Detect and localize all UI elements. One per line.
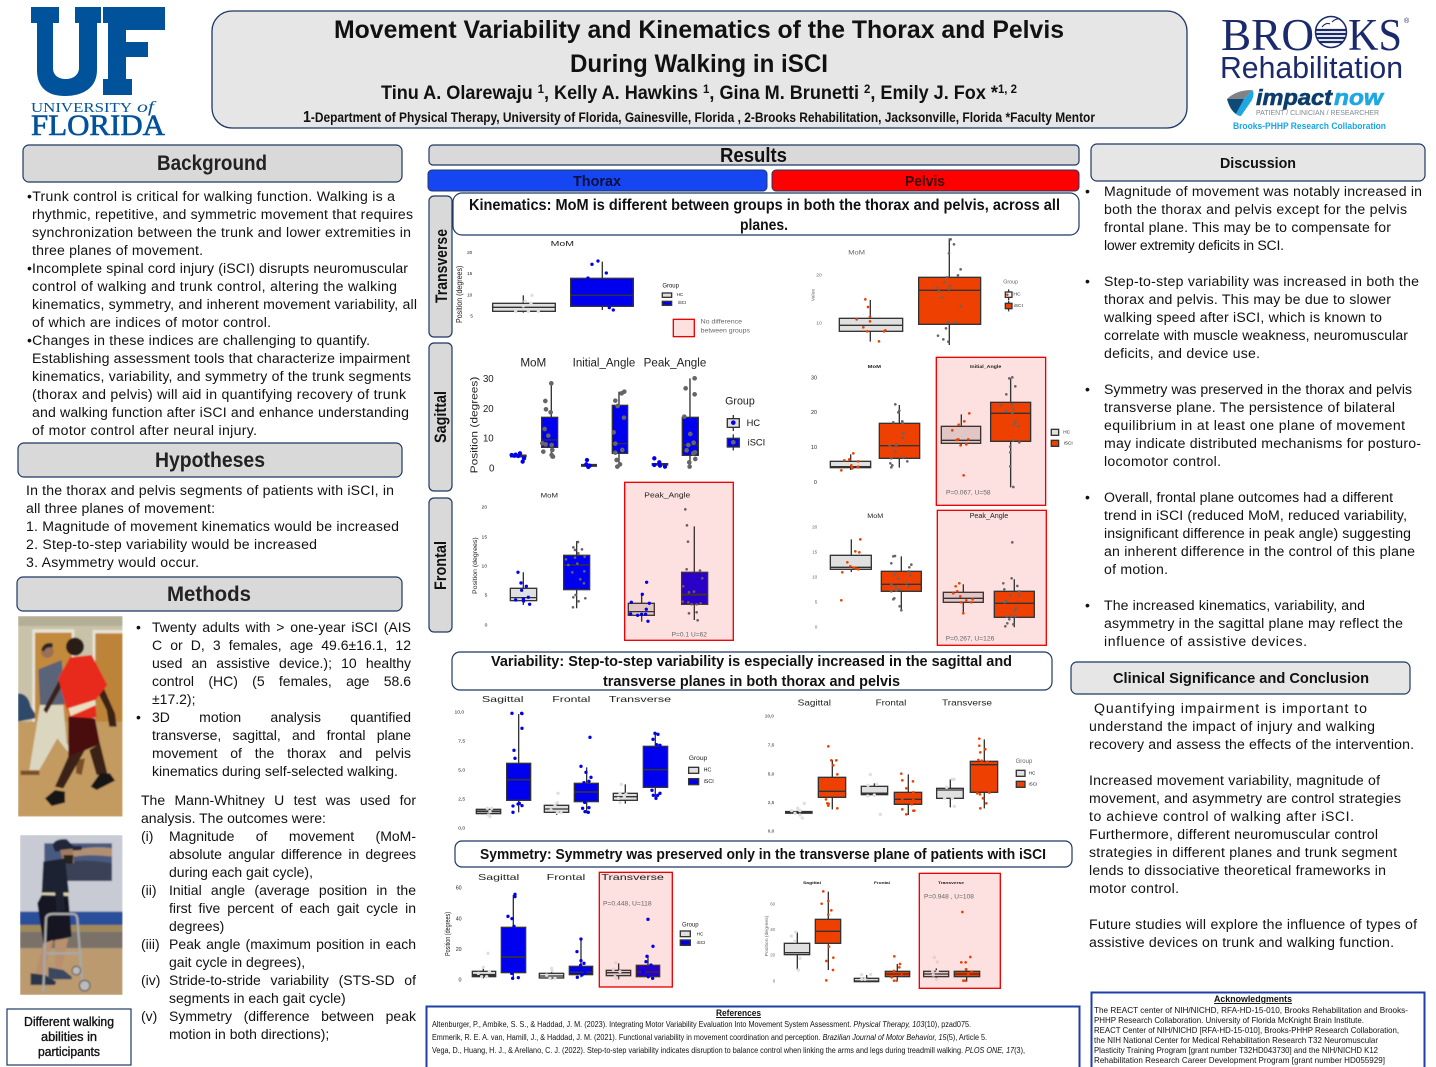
text block: hypotheses: 1. Magnitude of movement kinematics would be increased [26, 518, 399, 534]
text block: background: control of walking and trunk control, altering the walking [32, 278, 397, 294]
text block: methods: ±17.2); [152, 691, 195, 707]
chart: thorax variability: 2,5 [458, 797, 465, 803]
logo: Brooks Rehabilitation: Brooks-PHHP Research Collaboration [1233, 121, 1386, 132]
highlight: no difference transverse: Transverse [601, 872, 664, 882]
chart: thorax sagittal: 20 [483, 404, 494, 415]
highlight: no difference transverse: Transverse [938, 880, 965, 885]
chart: pelvis sagittal: HC [1063, 430, 1071, 435]
text block: discussion: both the thorax and pelvis except for the pelvis [1104, 201, 1407, 217]
text block: discussion: insignificant difference in peak angle) suggesting [1104, 525, 1411, 541]
chart: thorax transverse MoM [455, 239, 750, 337]
heading: variability [452, 652, 1052, 690]
title line 1: Movement Variability and Kinematics of the Thorax and Pelvis [334, 16, 1064, 44]
chart: pelvis sagittal: 20 [811, 410, 817, 416]
chart: pelvis variability: Group [1016, 759, 1033, 765]
text block: methods: C or D, 3 females, age 49.6±16.1, 12 [152, 637, 411, 653]
text block: discussion: • [1085, 183, 1090, 199]
text block: methods: (v) [141, 1008, 157, 1024]
heading: symmetry [455, 841, 1072, 867]
text block: methods: transverse, sagittal, and frontal plane [152, 727, 411, 743]
text block: methods: Initial angle (average position in the [169, 882, 416, 898]
text block: background: (thorax and pelvis) will aid in quantifying recovery of trunk [32, 386, 407, 402]
chart: thorax sagittal: 30 [483, 374, 494, 385]
chart: pelvis variability: Frontal [876, 698, 906, 708]
chart: pelvis frontal: 0 [815, 624, 818, 629]
text block: conclusion: Furthermore, different neuromuscular control [1089, 826, 1378, 842]
text block: discussion: Symmetry was preserved in the thorax and pelvis [1104, 381, 1412, 397]
chart: thorax frontal: 5 [485, 593, 488, 599]
text block: hypotheses: 2. Step-to-step variability would be increased [26, 536, 317, 552]
text block: background [27, 188, 417, 438]
authors: 2 [864, 82, 871, 96]
column header: thorax: Thorax [573, 173, 622, 190]
panel: references: Altenburger, P., Ambike, S. S., & Haddad, J. M. (2023). Integrating Motor Variability Evaluation Into Movement System Assessment. Physical Therapy, 103(10), pzad075. [432, 1020, 971, 1029]
text block: background: kinematics, symmetry, and inherent movement variability, all [32, 296, 417, 312]
legend: no difference: between groups [701, 328, 750, 335]
panel: acknowledgments: REACT Center of NIH/NICHD [RFA-HD-15-010], Brooks-PHHP Research Collaboration, [1094, 1025, 1399, 1035]
text block: methods: • [136, 709, 141, 725]
text block: discussion: of motion. [1104, 561, 1168, 577]
text block: discussion: frontal plane. This may be to compensate for [1104, 219, 1391, 235]
text block: methods: The Mann-Whitney U test was used for [141, 792, 416, 808]
highlight: no difference transverse: P=0.448, U=118 [603, 901, 652, 908]
text block: methods: • [136, 619, 141, 635]
row label: transverse: Transverse [433, 229, 451, 303]
chart: pelvis variability: 7,5 [768, 743, 775, 748]
logo: Brooks Rehabilitation: impact [1256, 85, 1334, 110]
text block: background: three planes of movement. [32, 242, 203, 258]
chart: thorax frontal: 10 [482, 564, 487, 570]
panel: hypotheses [18, 443, 402, 570]
callout: photo caption: Different walking [24, 1015, 114, 1029]
heading: kinematics [453, 193, 1079, 235]
text block: background: rhythmic, repetitive, and symmetric movement that requires [32, 206, 413, 222]
chart: thorax variability: 5,0 [458, 768, 465, 774]
chart: pelvis variability: 10,0 [765, 714, 774, 719]
photo: participant using walker [20, 835, 123, 995]
text block: discussion: correlate with muscle weakness, neuromuscular [1104, 327, 1408, 343]
text block: methods: during each gait cycle), [169, 864, 313, 880]
text block: discussion: • [1085, 597, 1090, 613]
panel: background [23, 145, 417, 438]
text block: discussion: The increased kinematics, variability, and [1104, 597, 1365, 613]
chart: pelvis symmetry [764, 873, 1000, 988]
text block: discussion: walking speed after iSCI, which is known to [1103, 309, 1382, 325]
callout: photo caption: abilities in [41, 1030, 97, 1044]
heading: background [23, 145, 402, 182]
text block: conclusion: strategies in different planes and trunk segment [1089, 844, 1397, 860]
heading: variability: Variability: Step-to-step variability is especially increased in the sagittal and [491, 654, 1012, 670]
text block: background: •Changes in these indices are challenging to quantify. [27, 332, 370, 348]
highlight: no difference peak angle: Peak_Angle [970, 513, 1008, 520]
chart: thorax transverse MoM: 20 [467, 250, 473, 255]
chart: thorax symmetry: Position (degrees) [443, 912, 452, 956]
text block: discussion: thorax and pelvis. This may be due to slower [1104, 291, 1391, 307]
chart: thorax variability: 10,0 [454, 710, 464, 716]
chart: pelvis sagittal [811, 357, 1073, 505]
logo: Brooks Rehabilitation: KS [1348, 10, 1402, 60]
chart: thorax frontal: Position (degrees) [473, 537, 479, 594]
chart: pelvis transverse MoM [810, 238, 1023, 345]
text block: discussion: equilibrium in at least one plane of movement [1104, 417, 1405, 433]
text block: hypotheses [26, 482, 399, 570]
chart: thorax sagittal: Group [725, 395, 755, 407]
chart: pelvis symmetry: Frontal [874, 880, 890, 885]
text block: methods: Symmetry (difference between peak [169, 1008, 416, 1024]
authors: , Kelly A. Hawkins [544, 83, 703, 104]
chart: thorax transverse MoM: iSCI [678, 300, 686, 305]
authors: Tinu A. Olarewaju [381, 83, 540, 104]
text block: methods: segments in each gait cycle) [169, 990, 346, 1006]
text block: discussion: influence of assistive devices. [1104, 633, 1307, 649]
heading: variability: transverse planes in both thorax and pelvis [603, 674, 900, 690]
chart: thorax transverse MoM: 10 [467, 293, 473, 298]
chart: thorax sagittal: 0 [489, 463, 494, 474]
heading: clinical significance [1071, 662, 1410, 694]
heading: hypotheses [18, 443, 402, 477]
chart: pelvis symmetry: Position (degrees) [764, 915, 770, 956]
logo: University of Florida: UNIVERSITY [31, 101, 132, 116]
chart: thorax variability: 0,0 [458, 826, 465, 832]
column header: pelvis [772, 170, 1079, 191]
chart: pelvis transverse MoM: Value [810, 289, 816, 301]
text block: conclusion: recovery and assess the effects of the intervention. [1089, 736, 1414, 752]
chart: pelvis transverse MoM: 10 [816, 321, 822, 327]
text block: conclusion: Future studies will explore the influence of types of [1089, 916, 1417, 932]
text block: methods: Stride-to-stride variability (STS-SD of [169, 972, 416, 988]
text block: discussion: asymmetry in the sagittal plane may reflect the [1104, 615, 1403, 631]
row label: transverse [429, 196, 452, 337]
chart: pelvis variability: 0,0 [768, 829, 775, 834]
text block: discussion: locomotor control. [1104, 453, 1221, 469]
heading: methods [17, 577, 402, 611]
heading: references: References [716, 1008, 761, 1019]
title banner [212, 11, 1187, 128]
chart: thorax variability: Transverse [609, 694, 671, 704]
text block: methods: (ii) [141, 882, 157, 898]
chart: thorax variability: 7,5 [458, 739, 465, 745]
chart: thorax frontal: MoM [541, 493, 558, 500]
chart: thorax variability [454, 694, 714, 832]
text block: methods: degrees) [169, 918, 224, 934]
chart: thorax symmetry: 0 [459, 977, 462, 983]
text block: background: synchronization between the trunk and lower extremities in [32, 224, 411, 240]
chart: thorax symmetry: 20 [456, 947, 462, 953]
logo: Brooks Rehabilitation: PATIENT / CLINICIAN / RESEARCHER [1256, 110, 1379, 117]
highlight: no difference initial angle [936, 357, 1046, 505]
callout: photo caption: participants [38, 1045, 100, 1059]
chart: thorax transverse MoM: 5 [470, 314, 473, 319]
chart: pelvis variability [765, 698, 1037, 834]
text block: discussion [1085, 183, 1422, 649]
chart: pelvis symmetry: Sagittal [803, 880, 821, 885]
logo: University of Florida: of [137, 99, 157, 116]
heading: kinematics: Kinematics: MoM is different between groups in both the thorax and pelvis, across all [469, 197, 1060, 214]
chart: thorax variability: iSCI [704, 779, 714, 785]
heading: kinematics: planes. [740, 217, 788, 234]
chart: pelvis symmetry: 20 [770, 953, 776, 958]
title line 2: During Walking in iSCI [570, 50, 828, 78]
text block: methods: (iii) [141, 936, 160, 952]
chart: thorax variability: Sagittal [482, 694, 524, 704]
panel: references: Emmerik, R. E. A. van, Hamill, J., & Haddad, J. M. (2021). Functional variability in movement coordination and perception. Brazilian Journal of Motor Behavior, 15(5), Article 5. [432, 1033, 987, 1042]
text block: discussion: • [1085, 489, 1090, 505]
text block: methods: (iv) [141, 972, 160, 988]
heading: symmetry: Symmetry: Symmetry was preserved only in the transverse plane of patients with iSCI [480, 847, 1046, 863]
text block: methods: analysis. The outcomes were: [141, 810, 326, 826]
panel: references [426, 1006, 1080, 1067]
logo: Brooks Rehabilitation [1220, 10, 1410, 132]
panel: clinical significance and conclusion [1071, 662, 1417, 950]
highlight: no difference transverse: P=0.948 , U=108 [924, 894, 974, 901]
heading: methods: Methods [167, 583, 251, 606]
highlight: no difference initial angle: P=0.067, U=58 [946, 490, 991, 497]
chart: pelvis sagittal: MoM [868, 364, 881, 370]
logo: Brooks Rehabilitation: Rehabilitation [1220, 50, 1403, 85]
heading: discussion: Discussion [1220, 155, 1296, 172]
panel: acknowledgments: Plasticity Training Program [grant number T32HD043730] and the NIH/NICHD K12 [1094, 1045, 1378, 1055]
text block: background: kinematics, variability, and symmetry of the trunk segments [32, 368, 411, 384]
chart: pelvis frontal: 15 [812, 550, 818, 555]
text block: methods: control (HC) (5 females, age 58.6 [152, 673, 411, 689]
chart: pelvis transverse MoM: Group [1003, 280, 1018, 286]
authors: 1, 2 [998, 82, 1017, 96]
chart: thorax sagittal: Initial_Angle [573, 356, 636, 370]
chart: thorax symmetry: Sagittal [478, 872, 519, 882]
chart: pelvis variability: iSCI [1029, 782, 1037, 787]
text block: conclusion: motor control. [1089, 880, 1179, 896]
chart: pelvis symmetry: 40 [770, 927, 776, 932]
chart: pelvis symmetry: 0 [773, 979, 776, 984]
photo: participant walking with therapist [18, 616, 123, 817]
text block: methods: Twenty adults with > one-year iSCI (AIS [152, 619, 411, 635]
highlight: no difference transverse [919, 873, 1000, 988]
row label: sagittal [429, 343, 452, 491]
text block: methods: (i) [141, 828, 153, 844]
panel: acknowledgments: Rehabilitation Research Career Development Program [grant number HD055929] [1094, 1055, 1385, 1065]
panel: discussion [1085, 144, 1425, 649]
chart: pelvis sagittal: 0 [814, 480, 817, 486]
chart: pelvis frontal: MoM [867, 513, 883, 520]
text block: conclusion [1089, 700, 1417, 950]
chart: pelvis transverse MoM: MoM [848, 250, 865, 257]
chart: pelvis transverse MoM: HC [1013, 292, 1021, 298]
text block: conclusion: movement, and asymmetry are control strategies [1089, 790, 1401, 806]
chart: thorax sagittal: Peak_Angle [644, 356, 707, 370]
text block: methods: 3D motion analysis quantified [152, 709, 411, 725]
chart: thorax variability: Group [689, 755, 708, 762]
chart: thorax variability: HC [704, 768, 711, 774]
chart: thorax symmetry: 40 [456, 916, 462, 922]
text block: conclusion: assistive devices on trunk and walking function. [1089, 934, 1394, 950]
highlight: no difference initial angle: Initial_Angle [970, 364, 1002, 370]
chart: thorax variability: Frontal [552, 694, 590, 704]
chart: thorax symmetry: Frontal [547, 872, 585, 882]
chart: pelvis variability: 5,0 [768, 771, 775, 776]
chart: pelvis sagittal: iSCI [1064, 441, 1073, 446]
chart: pelvis frontal: 5 [815, 600, 818, 605]
text block: hypotheses: 3. Asymmetry would occur. [26, 554, 199, 570]
highlight: no difference peak angle [937, 510, 1046, 645]
chart: pelvis sagittal: 30 [811, 375, 817, 381]
chart: thorax transverse MoM: Group [662, 284, 680, 290]
heading: background: Background [157, 152, 267, 175]
text block: background: of which are indices of motor control. [32, 314, 271, 330]
row label: frontal: Frontal [432, 541, 450, 590]
chart: pelvis frontal: 20 [812, 524, 818, 529]
authors: , Gina M. Brunetti [709, 83, 864, 104]
chart: thorax sagittal [470, 356, 765, 474]
chart: thorax symmetry: iSCI [697, 940, 705, 945]
chart: pelvis variability: HC [1029, 771, 1036, 776]
chart: pelvis variability: Transverse [942, 698, 992, 708]
chart: thorax frontal [473, 482, 733, 640]
legend: no difference [673, 319, 750, 337]
chart: thorax transverse MoM: 15 [467, 271, 473, 276]
highlight: no difference peak angle: P=0.1 U=62 [672, 632, 708, 638]
text block: conclusion: Quantifying impairment is important to [1094, 700, 1367, 716]
text block: background: of motor control after neural injury. [32, 422, 257, 438]
highlight: no difference peak angle: Peak_Angle [644, 493, 690, 500]
text block: conclusion: to achieve control of walking after iSCI. [1089, 808, 1354, 824]
text block: discussion: Step-to-step variability was increased in both the [1104, 273, 1419, 289]
heading: acknowledgments: Acknowledgments [1214, 994, 1292, 1005]
chart: pelvis frontal [812, 510, 1046, 645]
chart: pelvis variability: 2,5 [768, 800, 775, 805]
chart: thorax symmetry: HC [697, 931, 704, 936]
chart: pelvis variability: Sagittal [798, 698, 831, 708]
text block: discussion: may indicate distributed mechanisms for posturo- [1104, 435, 1421, 451]
chart: thorax sagittal: Position (degrees) [470, 377, 481, 473]
chart: thorax frontal: 0 [485, 623, 488, 629]
chart: thorax sagittal: 10 [483, 434, 494, 445]
chart: thorax symmetry [443, 872, 705, 987]
text block: methods: first five percent of each gait cycle in [169, 900, 416, 916]
text block: methods: used an assistive device.); 10 healthy [152, 655, 411, 671]
text block: discussion: trend in iSCI (reduced MoM, reduced variability, [1104, 507, 1407, 523]
authors: , Emily J. Fox * [870, 83, 999, 104]
column header: thorax [428, 170, 767, 191]
chart: pelvis sagittal: 10 [811, 445, 817, 451]
chart: thorax sagittal: MoM [520, 356, 546, 370]
text block: background: •Trunk control is critical for walking function. Walking is a [27, 188, 395, 204]
row label: frontal [429, 498, 452, 632]
panel: acknowledgments [1092, 992, 1424, 1067]
text block: methods: Magnitude of movement (MoM- [169, 828, 416, 844]
text block: methods: movement of the thorax and pelvis [152, 745, 411, 761]
chart: thorax sagittal: HC [747, 418, 760, 428]
text block: background: Establishing assessment tools that characterize impairment [32, 350, 410, 366]
text block: methods: motion in both directions); [169, 1026, 329, 1042]
chart: thorax frontal: 20 [482, 504, 487, 510]
chart: thorax symmetry: 60 [456, 886, 462, 892]
text block: hypotheses: In the thorax and pelvis segments of patients with iSCI, in [26, 482, 394, 498]
heading: results [429, 145, 1079, 167]
chart: thorax transverse MoM: HC [677, 292, 683, 297]
chart: thorax transverse MoM: MoM [551, 239, 574, 248]
heading: hypotheses: Hypotheses [155, 449, 265, 472]
text block: hypotheses: all three planes of movement: [26, 500, 215, 516]
chart: pelvis symmetry: 60 [770, 902, 776, 907]
legend: no difference: No difference [701, 319, 742, 326]
text block: methods: gait cycle in degrees), [169, 954, 305, 970]
text block: discussion: • [1085, 273, 1090, 289]
panel: acknowledgments: The REACT center of NIH/NICHD, RFA-HD-15-010, Brooks Rehabilitation and Brooks- [1094, 1005, 1408, 1015]
chart: thorax symmetry: Group [682, 922, 699, 928]
panel: acknowledgments: PHHP Research Collaboration. University of Florida McKnight Brain Institute. [1094, 1015, 1364, 1025]
heading: discussion [1091, 144, 1425, 181]
panel: references: Vega, D., Huang, H. J., & Arellano, C. J. (2022). Step-to-step variability indicates disruption to balance control when linking the arms and legs during treadmill walking. PLOS ONE, 17(3), [432, 1046, 1025, 1055]
column header: pelvis: Pelvis [905, 173, 945, 190]
row label: sagittal: Sagittal [432, 391, 450, 443]
logo: Brooks Rehabilitation: BRO [1221, 10, 1314, 60]
callout: photo caption [7, 1009, 131, 1065]
highlight: no difference transverse [599, 872, 672, 987]
text block: discussion: Magnitude of movement was notably increased in [1104, 183, 1422, 199]
text block: discussion: deficits, and device use. [1104, 345, 1260, 361]
text block: conclusion: lends to dissociative theoretical frameworks in [1089, 862, 1386, 878]
text block: conclusion: Increased movement variability, magnitude of [1089, 772, 1380, 788]
text block: methods [136, 619, 416, 1042]
affiliations: 1-Department of Physical Therapy, University of Florida, Gainesville, Florida , 2-Brooks Rehabilitation, Jacksonville, Florida *Faculty Mentor [303, 109, 1096, 126]
authors: 1 [703, 82, 710, 96]
chart: pelvis frontal: 10 [812, 575, 818, 580]
text block: conclusion: understand the impact of injury and walking [1089, 718, 1375, 734]
text block: discussion: • [1085, 381, 1090, 397]
text block: discussion: Overall, frontal plane outcomes had a different [1104, 489, 1393, 505]
text block: methods: absolute angular difference in degrees [169, 846, 416, 862]
heading: clinical significance: Clinical Significance and Conclusion [1113, 670, 1369, 687]
text block: discussion: an inherent difference in the control of this plane [1104, 543, 1415, 559]
text block: methods: Peak angle (maximum position in each [169, 936, 416, 952]
text block: discussion: lower extremity deficits in SCI. [1104, 237, 1284, 253]
chart: pelvis transverse MoM: 20 [816, 273, 822, 279]
heading: results: Results [720, 145, 787, 167]
text block: background: and walking function after iSCI and enhance understanding [32, 404, 409, 420]
authors: 1 [538, 82, 544, 96]
logo: University of Florida: FLORIDA [31, 109, 165, 142]
text block: methods: kinematics during self-selected walking. [152, 763, 398, 779]
chart: pelvis transverse MoM: iSCI [1014, 303, 1023, 309]
panel: acknowledgments: the NIH National Center for Medical Rehabilitation Research T32 Neuromuscular [1094, 1035, 1378, 1045]
chart: thorax sagittal: iSCI [748, 438, 765, 448]
highlight: no difference peak angle [625, 482, 733, 640]
logo: Brooks Rehabilitation: ® [1404, 17, 1410, 25]
text block: background: •Incomplete spinal cord injury (iSCI) disrupts neuromuscular [27, 260, 408, 276]
logo: Brooks Rehabilitation: now [1334, 85, 1385, 110]
text block: discussion: transverse plane. The persistence of bilateral [1104, 399, 1395, 415]
chart: thorax transverse MoM: Position (degrees) [455, 265, 464, 323]
chart: thorax frontal: 15 [482, 534, 487, 540]
logo: University of Florida [31, 7, 165, 142]
highlight: no difference peak angle: P=0.267, U=126 [946, 635, 995, 642]
